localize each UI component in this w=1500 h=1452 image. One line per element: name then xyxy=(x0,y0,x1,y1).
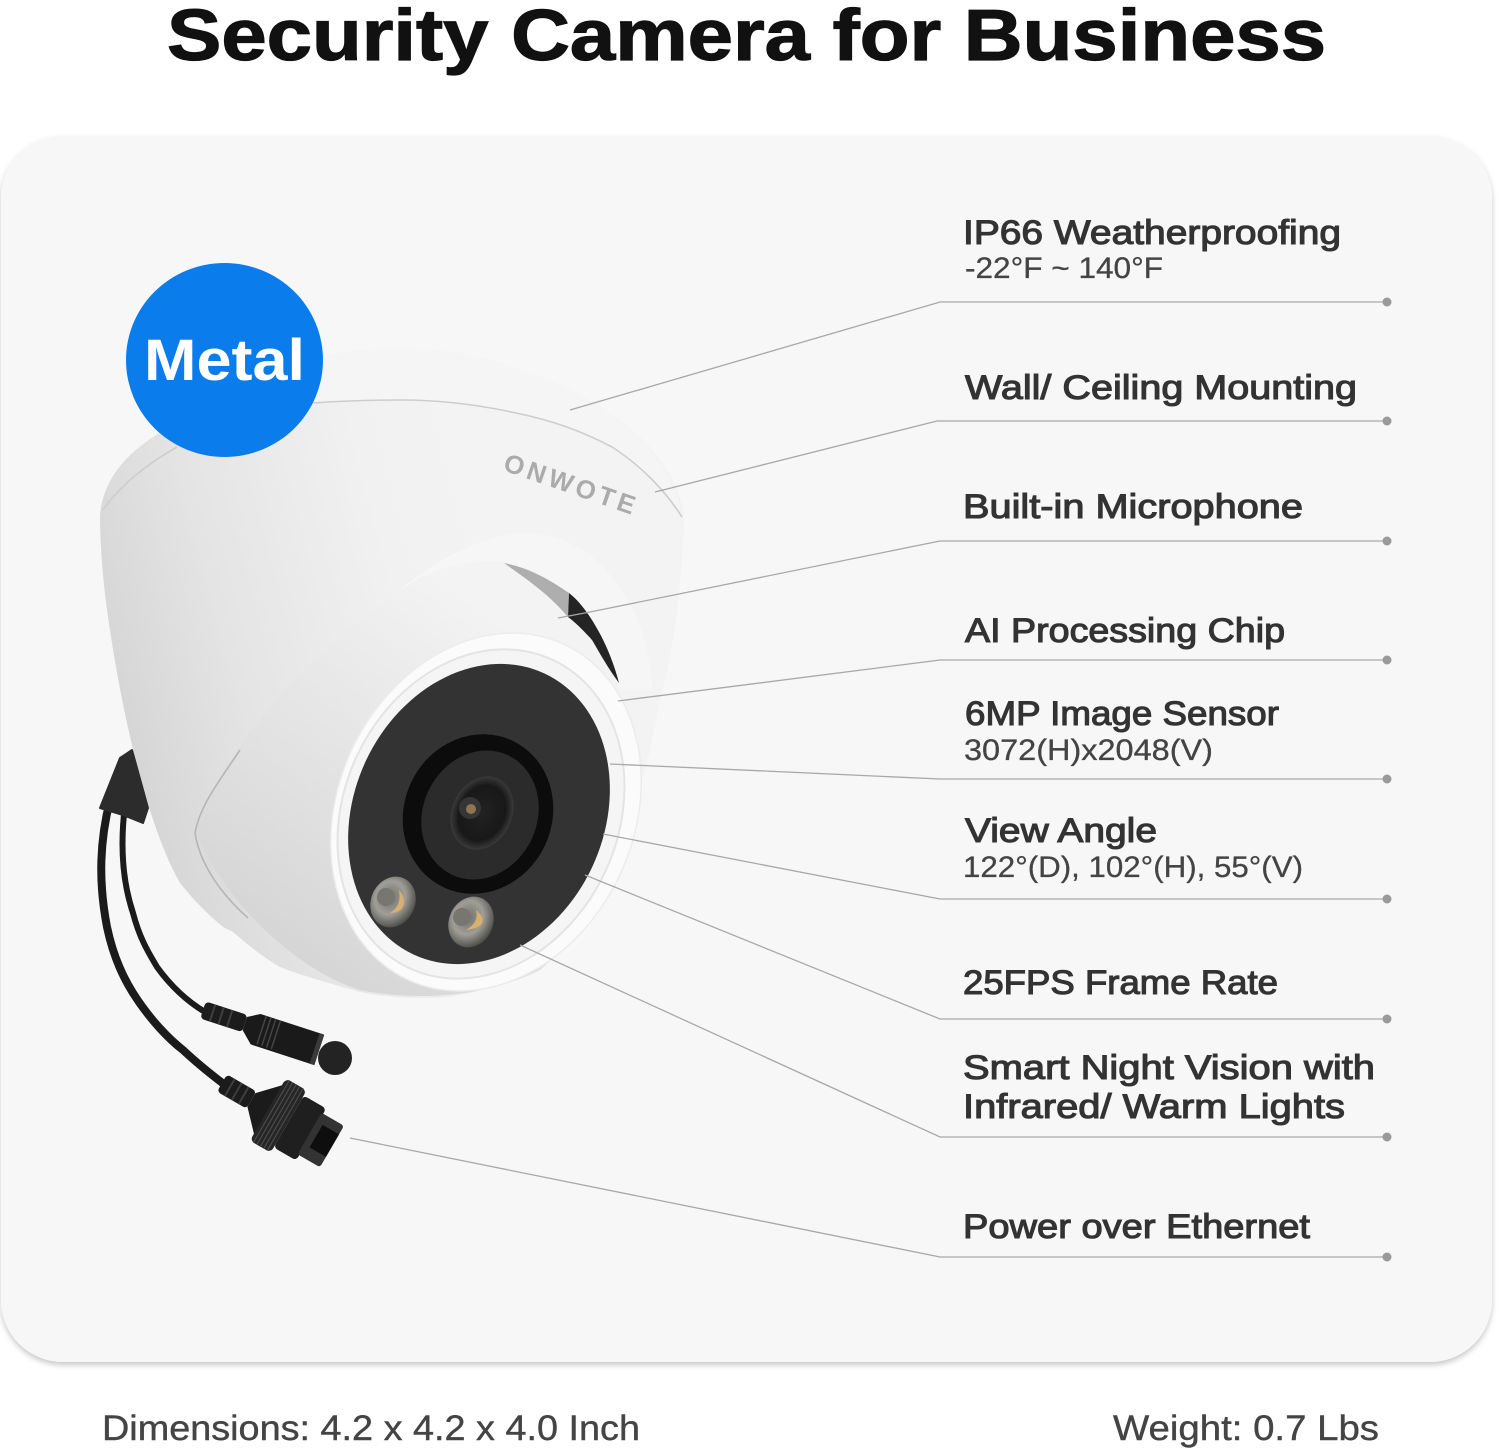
camera illustration xyxy=(100,348,698,1178)
feature: view angle: 122°(D), 102°(H), 55°(V) xyxy=(963,851,1303,884)
brand logo: ONWOTE xyxy=(500,447,639,520)
LED right xyxy=(440,889,502,955)
badge: metal: Metal xyxy=(144,328,305,393)
badge: metal xyxy=(126,263,323,457)
feature: microphone: Built-in Microphone xyxy=(963,488,1303,526)
feature: view angle xyxy=(963,812,1303,884)
lens outer ring xyxy=(377,709,579,919)
front bezel xyxy=(274,582,698,1042)
feature: night vision: Smart Night Vision with xyxy=(963,1049,1375,1087)
leader lines and end dots xyxy=(350,298,1392,1262)
feature: image sensor: 3072(H)x2048(V) xyxy=(964,734,1213,767)
feature: frame rate: 25FPS Frame Rate xyxy=(963,964,1278,1002)
feature: mounting: Wall/ Ceiling Mounting xyxy=(965,369,1357,407)
feature: night vision: Infrared/ Warm Lights xyxy=(963,1088,1345,1126)
neck xyxy=(195,561,634,996)
lens textured plate xyxy=(400,731,560,899)
dome top band highlight xyxy=(190,348,682,517)
camera face xyxy=(300,621,658,1007)
feature: night vision xyxy=(963,1049,1375,1126)
feature: image sensor: 6MP Image Sensor xyxy=(965,695,1279,733)
cable: network xyxy=(101,800,225,1085)
connector cap xyxy=(318,1041,352,1075)
feature: weatherproofing: -22°F ~ 140°F xyxy=(965,252,1163,285)
dimensions: Dimensions: 4.2 x 4.2 x 4.0 Inch xyxy=(102,1409,640,1448)
feature: image sensor xyxy=(964,695,1279,767)
dark gap behind neck: grey part xyxy=(504,563,569,617)
lens glass xyxy=(439,766,525,860)
feature: weatherproofing xyxy=(963,214,1341,285)
feature: weatherproofing: IP66 Weatherproofing xyxy=(963,214,1341,252)
neck seam xyxy=(195,750,248,918)
LED left xyxy=(362,869,424,935)
connector: ethernet plug xyxy=(204,1052,350,1178)
cable boot xyxy=(100,750,148,823)
recess lip xyxy=(400,533,652,690)
cable: power xyxy=(122,805,205,1012)
feature: PoE: Power over Ethernet xyxy=(963,1208,1311,1246)
feature: view angle: View Angle xyxy=(965,812,1157,850)
lens pupil xyxy=(459,797,481,819)
dome seam xyxy=(103,400,682,517)
dark gap behind neck: black part xyxy=(568,593,619,683)
feature: AI chip: AI Processing Chip xyxy=(965,612,1285,650)
connector: power jack xyxy=(197,997,324,1065)
bezel inner ring xyxy=(285,602,677,1026)
dome housing xyxy=(100,348,684,998)
weight: Weight: 0.7 Lbs xyxy=(1113,1409,1379,1448)
